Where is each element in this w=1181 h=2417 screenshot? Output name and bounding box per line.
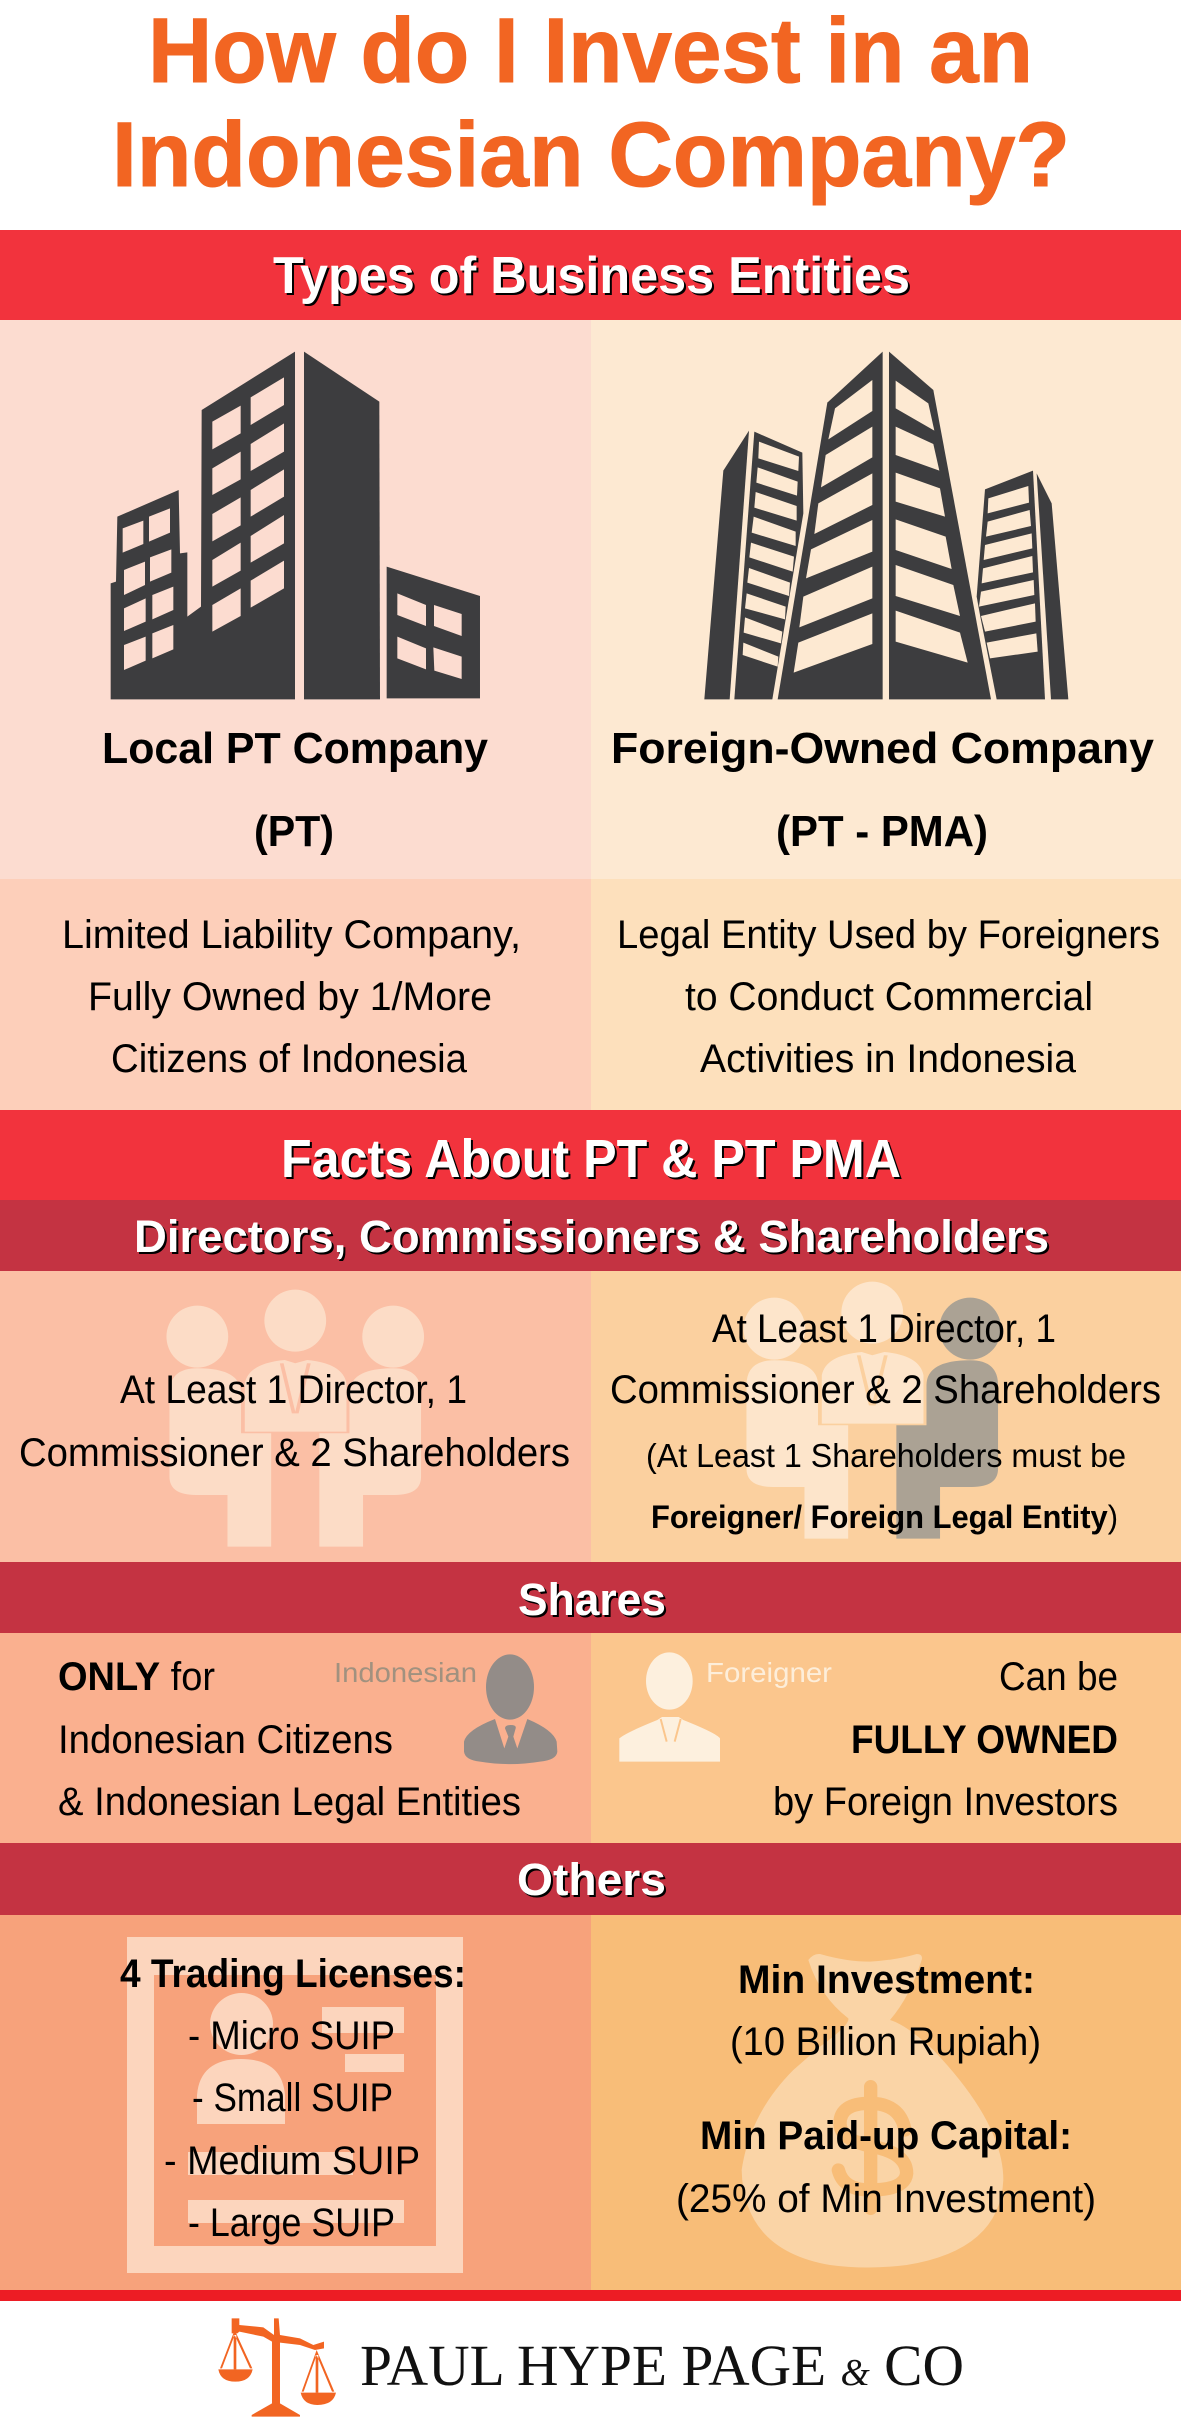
sub-banner: shares <box>0 1562 1181 1633</box>
shares text: Can be <box>999 1655 1118 1699</box>
icon: three people with one highlighted <box>743 1282 1001 1539</box>
section banner: facts about PT and PT PMA <box>0 1110 1181 1200</box>
panel: local PT company <box>0 320 591 879</box>
label: Foreigner: Foreigner <box>706 1657 832 1688</box>
panel: PT PMA description <box>591 879 1181 1110</box>
panel: trading licenses <box>0 1915 591 2290</box>
requirement text: Commissioner & 2 Shareholders <box>610 1368 1161 1412</box>
licenses list: - Large SUIP <box>188 2201 395 2245</box>
shares text <box>58 1655 521 1824</box>
section banner: types of business entities: Types of Business Entities <box>273 247 910 305</box>
icon: office buildings <box>111 352 480 699</box>
sub-banner: directors, commissioners and shareholders <box>0 1200 1181 1271</box>
panel: PT PMA description: to Conduct Commercial <box>685 975 1093 1019</box>
investment text: Min Investment: <box>738 1958 1035 2002</box>
shares text: FULLY OWNED <box>851 1718 1118 1762</box>
panel: local PT description: Fully Owned by 1/More <box>88 975 492 1019</box>
panel: PT PMA description: Legal Entity Used by Foreigners <box>617 913 1160 957</box>
requirement text: Commissioner & 2 Shareholders <box>19 1431 570 1475</box>
title: How do I Invest in an <box>148 0 1033 102</box>
shares text: & Indonesian Legal Entities <box>58 1780 521 1824</box>
icon: foreign person <box>619 1652 720 1762</box>
requirement text: At Least 1 Director, 1 <box>712 1307 1056 1351</box>
shares text: ONLY for <box>58 1655 215 1699</box>
company name <box>102 724 489 856</box>
company name <box>611 724 1155 856</box>
shares text: by Foreign Investors <box>773 1780 1118 1824</box>
shares text: Indonesian Citizens <box>58 1718 393 1762</box>
sub-banner: shares: Shares <box>518 1574 666 1625</box>
panel: foreign-owned company <box>591 320 1181 879</box>
logo wordmark: PAUL HYPE PAGE & CO <box>360 2333 964 2398</box>
company name: Foreign-Owned Company <box>611 724 1155 773</box>
panel: local PT description: Limited Liability Company, <box>62 913 521 957</box>
panel: PT PMA description: Activities in Indonesia <box>700 1037 1077 1081</box>
company name: (PT) <box>254 807 334 856</box>
panel: PT directors <box>0 1271 591 1562</box>
company name: (PT - PMA) <box>776 807 988 856</box>
icon: skyscrapers <box>704 352 1068 699</box>
panel: PT PMA shares <box>591 1633 1181 1843</box>
licenses list: - Micro SUIP <box>188 2014 395 2058</box>
logo: scales of justice <box>218 2318 336 2417</box>
sub-banner: others: Others <box>517 1854 666 1905</box>
icon: money bag <box>742 1954 1003 2267</box>
sub-banner: others <box>0 1843 1181 1915</box>
shares text <box>773 1655 1118 1824</box>
investment text: (10 Billion Rupiah) <box>730 2020 1041 2064</box>
section banner: types of business entities <box>0 230 1181 320</box>
title <box>112 0 1070 206</box>
investment text: Min Paid-up Capital: <box>700 2114 1072 2158</box>
footer divider <box>0 2290 1181 2301</box>
sub-banner: directors, commissioners and shareholders: Directors, Commissioners & Shareholders <box>134 1211 1049 1262</box>
panel: minimum investment <box>591 1915 1181 2290</box>
requirement text <box>610 1307 1161 1535</box>
investment text: (25% of Min Investment) <box>676 2177 1096 2221</box>
icon: license certificate <box>127 1937 463 2273</box>
licenses list: - Medium SUIP <box>164 2139 420 2183</box>
panel: PT PMA directors <box>591 1271 1181 1562</box>
licenses list <box>120 1952 466 2245</box>
requirement text: (At Least 1 Shareholders must be <box>646 1437 1126 1474</box>
requirement text: At Least 1 Director, 1 <box>120 1368 467 1412</box>
investment text <box>676 1958 1096 2221</box>
panel: local PT description <box>0 879 591 1110</box>
icon: three people <box>166 1290 424 1547</box>
title: Indonesian Company? <box>112 104 1070 206</box>
panel: local PT description: Citizens of Indonesia <box>111 1037 468 1081</box>
icon: Indonesian person <box>464 1654 557 1764</box>
panel: PT shares <box>0 1633 591 1843</box>
label: Indonesian: Indonesian <box>334 1657 477 1688</box>
licenses list: - Small SUIP <box>192 2076 393 2120</box>
requirement text: Foreigner/ Foreign Legal Entity) <box>651 1499 1118 1535</box>
section banner: facts about PT and PT PMA: Facts About PT & PT PMA <box>281 1129 901 1189</box>
company name: Local PT Company <box>102 724 489 773</box>
licenses list: 4 Trading Licenses: <box>120 1952 466 1996</box>
requirement text <box>19 1368 570 1475</box>
